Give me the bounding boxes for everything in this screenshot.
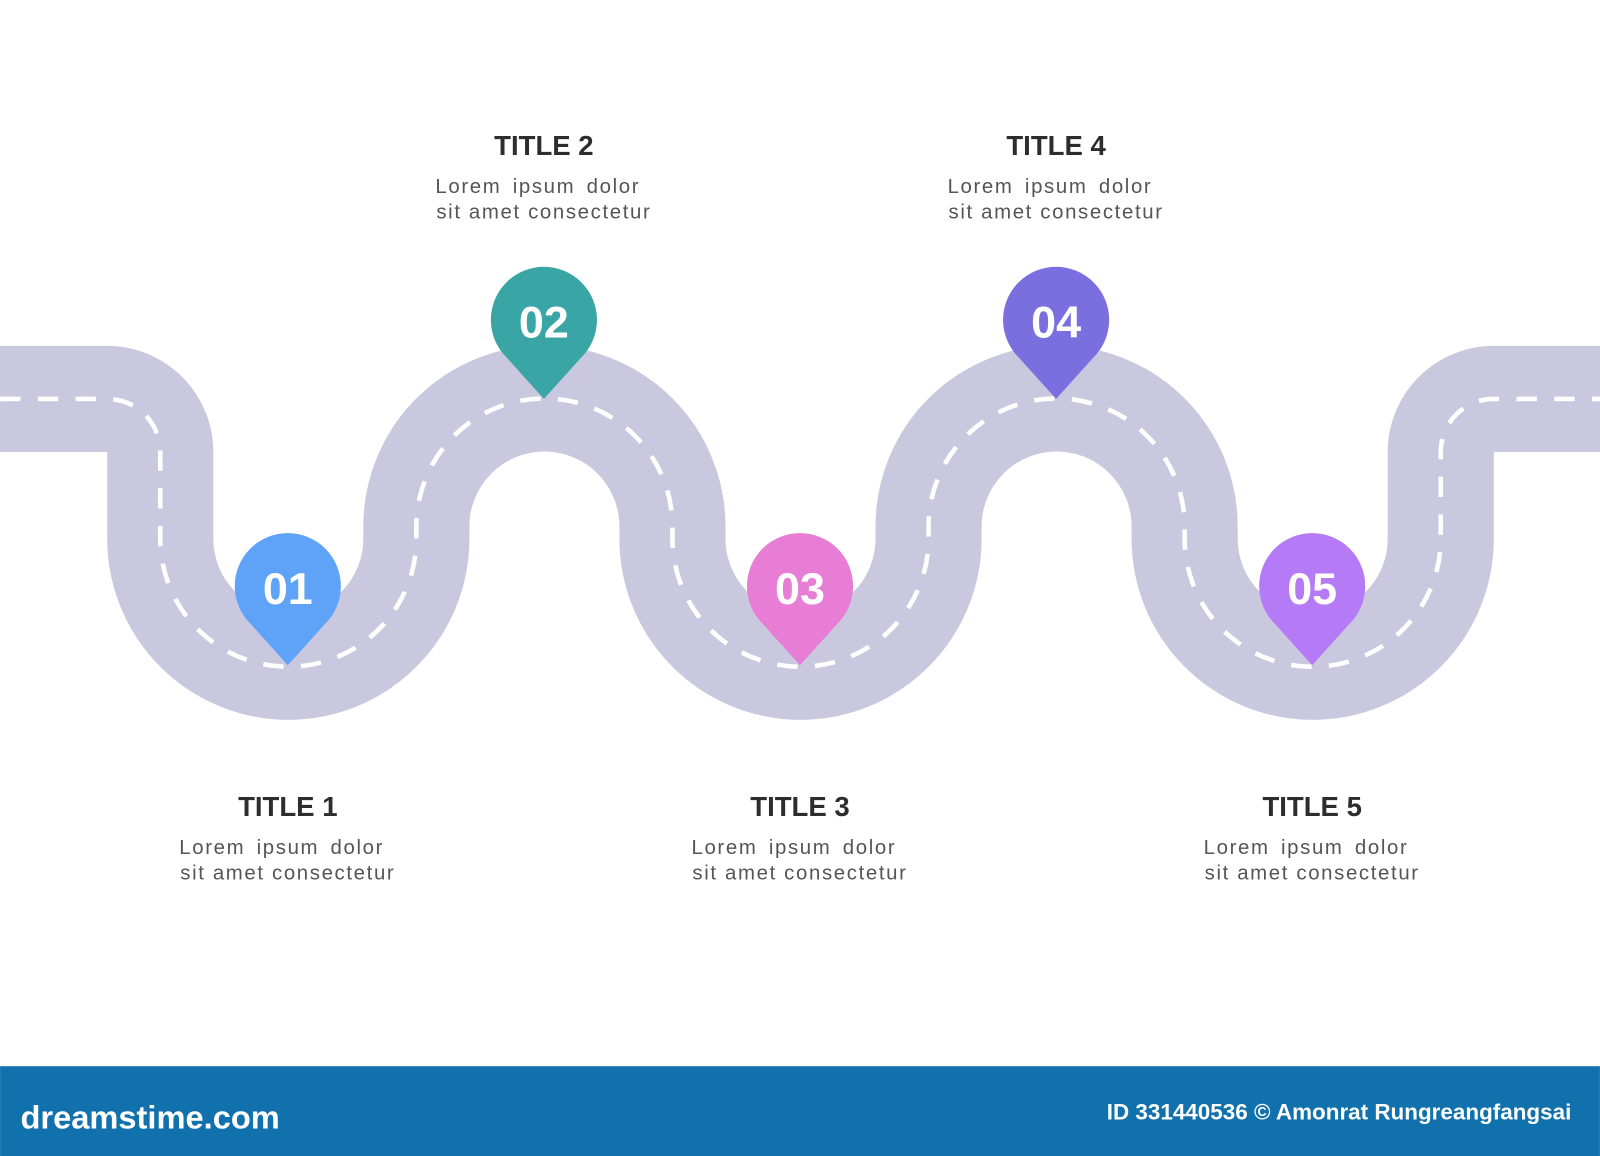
pin 04	[1003, 267, 1109, 399]
text: title 3: sit amet consectetur	[692, 862, 908, 884]
text: title 2: Lorem ipsum dolor	[435, 176, 640, 198]
text: title 2	[435, 130, 651, 223]
text: title 5: Lorem ipsum dolor	[1204, 837, 1408, 859]
text: title 1: sit amet consectetur	[180, 862, 395, 884]
footer bar: dreamstime.com	[20, 1098, 280, 1135]
text: title 5	[1204, 791, 1420, 884]
text: title 2: TITLE 2	[494, 130, 594, 161]
text: title 5: TITLE 5	[1262, 791, 1362, 822]
text: title 3	[691, 791, 908, 884]
pin 01: 01	[263, 563, 313, 614]
text: title 4	[948, 130, 1164, 223]
road	[0, 398, 1600, 667]
pin 03	[747, 533, 853, 665]
pin 03: 03	[775, 563, 825, 614]
pin 02: 02	[519, 297, 569, 348]
text: title 2: sit amet consectetur	[436, 201, 651, 223]
text: title 1: Lorem ipsum dolor	[179, 837, 384, 859]
pin 01	[235, 533, 341, 665]
text: title 4: Lorem ipsum dolor	[948, 176, 1152, 198]
pin 02	[491, 267, 597, 399]
text: title 1	[179, 791, 395, 884]
pin 05: 05	[1287, 563, 1337, 614]
footer bar: ID 331440536 © Amonrat Rungreangfangsai	[1107, 1099, 1571, 1124]
text: title 5: sit amet consectetur	[1205, 862, 1420, 884]
pin 04: 04	[1031, 297, 1081, 348]
footer bar	[0, 1066, 1600, 1156]
text: title 3: Lorem ipsum dolor	[691, 837, 896, 859]
text: title 4: sit amet consectetur	[949, 201, 1164, 223]
text: title 4: TITLE 4	[1006, 130, 1106, 161]
text: title 1: TITLE 1	[238, 791, 338, 822]
text: title 3: TITLE 3	[750, 791, 850, 822]
pin 05	[1259, 533, 1365, 665]
